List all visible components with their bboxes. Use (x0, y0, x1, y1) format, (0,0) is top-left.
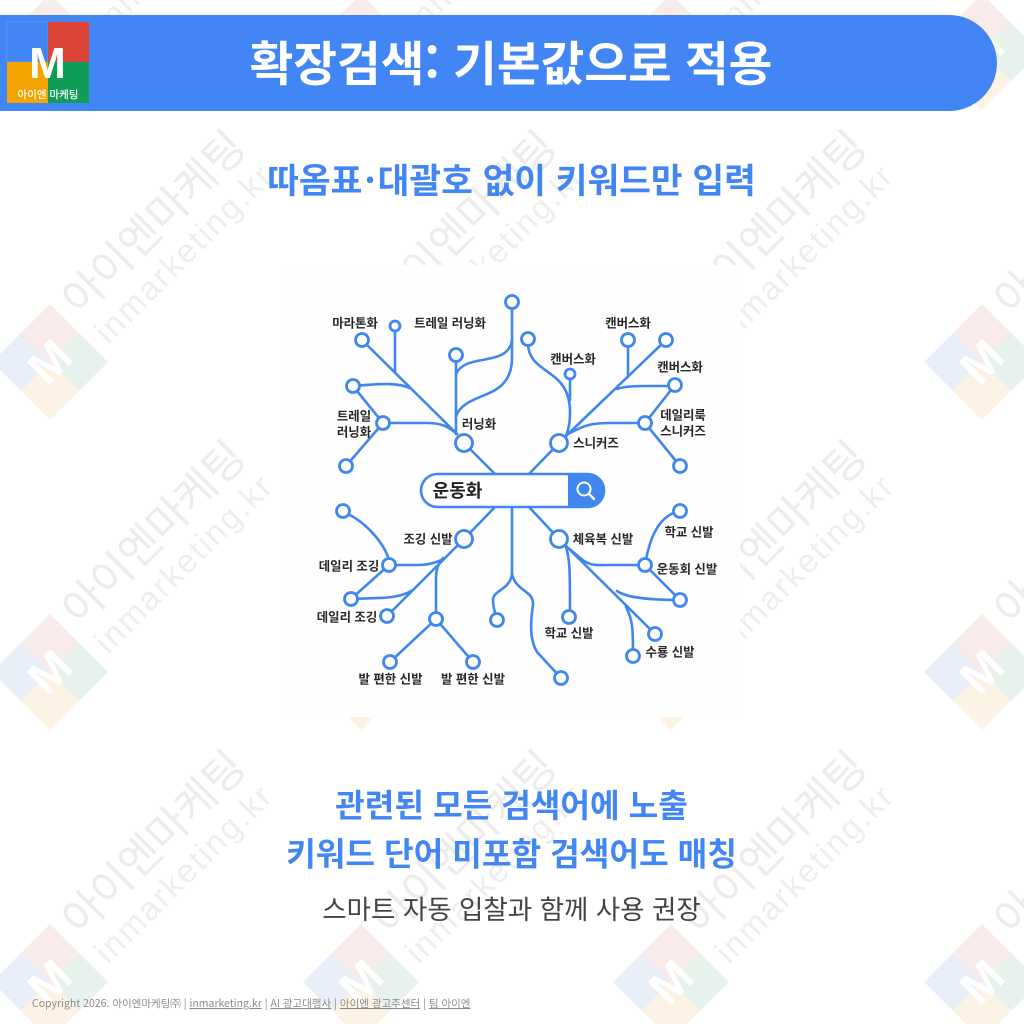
header banner (0, 15, 997, 111)
branch: 러닝화: 러닝화 (462, 414, 497, 432)
watermark pattern: 아이엔마케팅 (357, 425, 569, 637)
watermark pattern: inmarketing.kr (87, 466, 280, 660)
branch: 체육복 신발: 체육복 신발 (573, 530, 634, 548)
watermark pattern: M (328, 329, 393, 394)
branch: 조깅 신발: 조깅 신발 (403, 530, 453, 548)
branch: 체육복 신발: 수룡 신발 (645, 642, 695, 660)
body text: line 2: 키워드 단어 미포함 검색어도 매칭 (286, 830, 737, 876)
watermark pattern: M (328, 19, 393, 84)
branch: 체육복 신발: 운동회 신발 (657, 560, 718, 578)
watermark pattern: 아이엔마케팅 (46, 115, 258, 327)
watermark pattern: inmarketing.kr (708, 156, 901, 350)
watermark pattern: 아이엔마케팅 (46, 735, 258, 947)
branch: 스니커즈: 캔버스화 (605, 314, 651, 332)
watermark pattern: M (949, 19, 1014, 84)
branch: 체육복 신발: 학교 신발 (664, 522, 714, 540)
logo: 아이엔 마케팅 (18, 87, 78, 102)
watermark pattern: M (638, 949, 703, 1014)
icon: magnifier (578, 482, 594, 499)
branch: 체육복 신발: 학교 신발 (544, 624, 594, 642)
search bar: 운동화 (433, 477, 483, 503)
watermark pattern: 아이엔마케팅 (357, 115, 569, 327)
search bar (421, 473, 605, 508)
watermark pattern: M (949, 329, 1014, 394)
footer: Copyright 2026. 아이엔마케팅㈜ | inmarketing.kr | AI 광고대행사 | 아이엔 광고주센터 | 팀 아이엔 (32, 996, 470, 1011)
body text: line 1: 관련된 모든 검색어에 노출 (335, 781, 688, 827)
branch: 스니커즈 (522, 314, 706, 474)
watermark pattern: M (949, 639, 1014, 704)
branch: 조깅 신발 (317, 504, 506, 688)
branch: 조깅 신발: 데일리 조깅 (317, 608, 377, 626)
watermark pattern: 아이엔마케팅 (667, 115, 879, 327)
branch: 스니커즈: 캔버스화 (657, 358, 703, 376)
branch: center stem (490, 507, 568, 684)
branch: 러닝화 (332, 296, 518, 474)
branch: 스니커즈: 스니커즈 (573, 434, 619, 452)
watermark pattern: M (638, 329, 703, 394)
watermark pattern: M (638, 639, 703, 704)
branch: 러닝화: 트레일 러닝화 (414, 314, 487, 332)
branch: 러닝화: 마라톤화 (332, 314, 378, 332)
keyword tree diagram (285, 265, 740, 717)
watermark pattern: inmarketing.kr (398, 466, 591, 660)
watermark pattern: inmarketing.kr (87, 776, 280, 970)
watermark pattern: inmarketing.kr (398, 776, 591, 970)
watermark pattern: M (949, 949, 1014, 1014)
logo: M (29, 39, 66, 88)
watermark pattern: M (17, 19, 82, 84)
branch: 조깅 신발: 발 편한 신발 (441, 670, 506, 688)
watermark pattern: M (17, 329, 82, 394)
branch: 러닝화: 트레일 (337, 406, 371, 424)
logo (7, 22, 89, 103)
branch: 체육복 신발 (529, 504, 718, 662)
watermark pattern: M (17, 639, 82, 704)
note text: 스마트 자동 입찰과 함께 사용 권장 (322, 888, 701, 927)
branch: 스니커즈: 캔버스화 (550, 350, 596, 368)
watermark pattern: inmarketing.kr (398, 156, 591, 350)
branch: 러닝화: 러닝화 (337, 422, 372, 440)
watermark pattern: 아이엔마케팅 (667, 425, 879, 637)
watermark pattern: inmarketing.kr (87, 156, 280, 350)
watermark pattern: inmarketing.kr (708, 776, 901, 970)
watermark pattern: inmarketing.kr (708, 466, 901, 660)
watermark pattern: M (328, 639, 393, 704)
watermark pattern: M (638, 19, 703, 84)
branch: 스니커즈: 데일리룩 (660, 406, 706, 424)
subtitle: 따옴표·대괄호 없이 키워드만 입력 (267, 153, 756, 203)
watermark pattern: 아이엔마케팅 (357, 735, 569, 947)
branch: 스니커즈: 스니커즈 (660, 422, 706, 440)
watermark pattern: 아이엔마케팅 (667, 735, 879, 947)
watermark pattern: 아이엔마케팅 (46, 425, 258, 637)
title: 확장검색: 기본값으로 적용 (250, 26, 772, 95)
branch: 조깅 신발: 데일리 조깅 (319, 556, 379, 574)
watermark pattern: M (17, 949, 82, 1014)
branch: 조깅 신발: 발 편한 신발 (359, 670, 423, 688)
watermark pattern: M (328, 949, 393, 1014)
